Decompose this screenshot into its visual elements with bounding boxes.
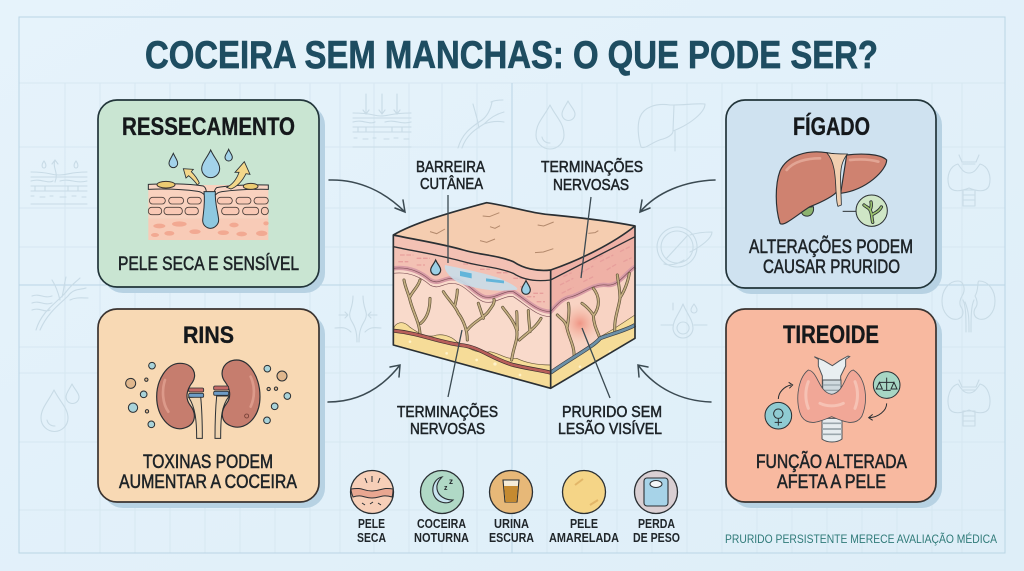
label: terminacoes nervosas top [541,156,643,194]
ghost icon: thyroid upper right [948,155,990,206]
left face dermis [393,235,551,388]
caption: figado: ALTERAÇÕES PODEM [749,236,913,258]
symptom: coceira noturna [414,470,470,545]
caption: rins: AUMENTAR A COCEIRA [119,472,297,493]
heading: ressecamento: RESSECAMENTO [122,113,295,141]
ghost icon: no-liver symbol [657,227,712,267]
blue barrier patch [445,265,517,291]
left face epidermis [393,235,551,312]
symptom: perda de peso: DE PESO [633,530,680,545]
caption: rins: TOXINAS PODEM [143,452,273,473]
ghost icon: converging nerves [335,296,381,342]
arrow: tireoide to skin [638,365,711,402]
panel: tireoide [726,309,942,508]
skin cross-section diagram [393,203,635,388]
panel: ressecamento [98,100,325,293]
right face epidermis [551,226,635,312]
ghost icon: drop in circle [661,303,707,338]
symptom: coceira noturna: NOTURNA [414,530,470,545]
symptom: pele amarelada: PELE [570,516,598,531]
leader lines [448,195,610,398]
arrow: figado to skin [640,180,715,212]
label: prurido sem lesao [558,404,662,438]
red spot [560,303,600,343]
block outline [393,226,635,388]
ghost icon: nerve branch 2 [458,100,504,148]
heading: tireoide: TIREOIDE [783,321,879,349]
symptom: perda de peso [633,470,680,545]
title: COCEIRA SEM MANCHAS: O QUE PODE SER? [145,34,878,77]
water drops [431,260,530,294]
right face dermis [551,226,635,388]
ghost icon: drops 2 [536,101,575,149]
label: terminacoes nervosas bottom: TERMINAÇÕES [397,401,498,421]
icon: liver [776,152,887,226]
label: terminacoes nervosas bottom: NERVOSAS [410,421,485,438]
left face fat layer [393,323,551,388]
caption: tireoide [756,451,907,493]
nerves casing [404,273,629,360]
ghost icon: skin with down arrows [353,94,411,147]
label: barreira cutanea: CUTÂNEA [420,174,483,193]
heading: figado: FÍGADO [793,112,870,141]
caption: figado [749,236,913,278]
caption: tireoide: FUNÇÃO ALTERADA [756,451,907,473]
symptom: pele amarelada [549,470,620,545]
icon: kidneys with toxins [126,360,291,438]
caption: figado: CAUSAR PRURIDO [763,257,900,278]
label: terminacoes nervosas top: TERMINAÇÕES [541,156,643,176]
label: prurido sem lesao: PRURIDO SEM [562,404,662,421]
symptom: urina escura [489,470,534,545]
heading: rins: RINS [183,322,234,349]
label: barreira cutanea: BARREIRA [416,159,485,176]
symptom: urina escura: ESCURA [489,530,534,545]
panel: figado [726,100,942,294]
ghost icon: kidneys [942,281,995,332]
symptom: perda de peso: PERDA [638,516,675,531]
label: terminacoes nervosas bottom [397,401,498,438]
caption: rins [119,452,297,493]
symptom: pele seca [350,470,394,545]
panel: rins [98,309,325,508]
right face fat layer [551,315,635,388]
label: barreira cutanea [416,159,485,193]
caption: ressecamento: PELE SECA E SENSÍVEL [118,254,299,275]
skin wrinkles [430,213,598,253]
symptom: urina escura: URINA [494,516,530,531]
symptom: coceira noturna: z [449,477,453,486]
label: prurido sem lesao: LESÃO VISÍVEL [558,418,662,438]
ghost icon: thyroid lower right [948,380,990,426]
symptom: pele seca: PELE [358,516,385,531]
ghost icon: nerve branch 1 [32,277,88,330]
blue vessel [551,325,635,373]
icon: thyroid [765,356,900,442]
red vessel [393,331,551,373]
icon: dry skin with drops [148,149,269,240]
arrow: rins to skin [328,365,400,402]
caption: tireoide: AFETA A PELE [777,472,886,493]
ghost icon: liver top [638,104,705,151]
mauve basal band [393,267,635,312]
ghost icon: drops 1 [41,384,79,431]
label: terminacoes nervosas top: NERVOSAS [553,177,629,194]
symptom: coceira noturna: COCEIRA [417,516,466,531]
symptom: coceira noturna: z [444,485,448,492]
symptom: pele seca: SECA [357,530,386,545]
ghost icon: skin layers with up arrow [31,160,87,204]
arrow: ressecamento to skin [329,180,405,212]
top surface [393,203,635,270]
symptom: pele amarelada: AMARELADA [549,530,620,545]
